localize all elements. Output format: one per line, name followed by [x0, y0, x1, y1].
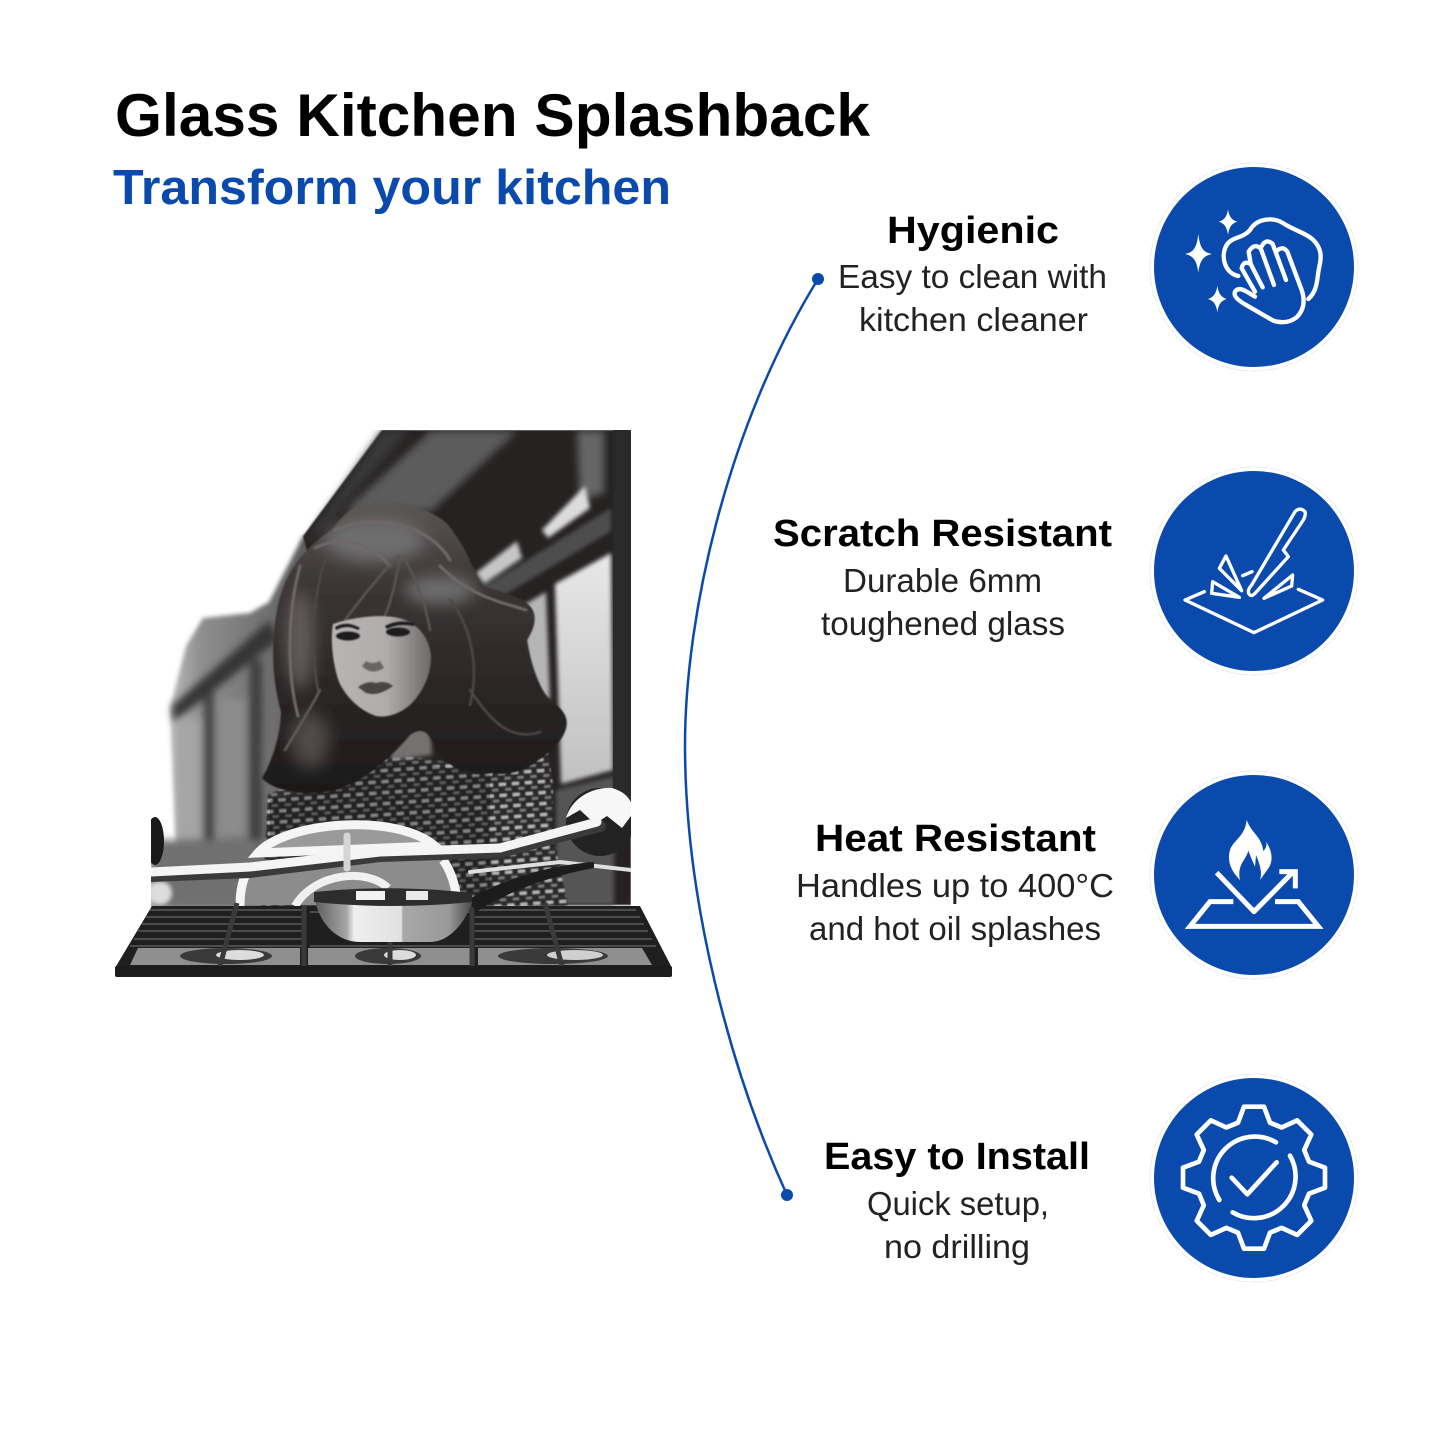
heading: Hygienic [887, 210, 1059, 252]
feature: Heat Resistant [796, 771, 1358, 979]
lower street haze [151, 840, 271, 910]
face [332, 616, 431, 717]
feature: Hygienic [838, 163, 1358, 371]
right mirror [566, 788, 634, 856]
heading: Easy to Install [824, 1136, 1090, 1178]
burners [180, 948, 608, 964]
icon: flame and heat arrow [1150, 771, 1358, 979]
frying pan [314, 862, 594, 942]
description: Quick setup, [867, 1185, 1049, 1222]
windows [476, 486, 614, 905]
icon: hand wiping with sparkles [1150, 163, 1358, 371]
pan handle [468, 862, 594, 912]
description: no drilling [884, 1228, 1030, 1265]
eave bands [303, 430, 604, 545]
description: Durable 6mm [843, 562, 1042, 599]
description [821, 562, 1065, 642]
hair soft tones [286, 518, 476, 768]
icon: knife scratching glass [1150, 467, 1358, 675]
neck [389, 730, 434, 762]
description: and hot oil splashes [809, 910, 1101, 947]
dark right edge [613, 430, 631, 830]
description: kitchen cleaner [859, 301, 1088, 338]
face shape [332, 616, 431, 717]
description [867, 1185, 1049, 1265]
left mirror [151, 817, 164, 865]
pan body [315, 893, 472, 942]
feature: Easy to Install [824, 1074, 1358, 1282]
top dot [812, 273, 824, 285]
bottom dot [781, 1189, 793, 1201]
description [796, 867, 1114, 947]
left building [151, 534, 316, 906]
hob front edge [115, 966, 672, 977]
grates [130, 910, 656, 946]
heading: Scratch Resistant [773, 513, 1112, 555]
pan supports [220, 903, 562, 966]
sweater [262, 752, 568, 906]
right building [303, 430, 631, 905]
heading: Heat Resistant [815, 818, 1096, 860]
description: Easy to clean with [838, 258, 1107, 295]
nose shadow [362, 661, 384, 672]
description: toughened glass [821, 605, 1065, 642]
hair [262, 502, 567, 793]
lips [358, 682, 393, 694]
description: Handles up to 400°C [796, 867, 1114, 904]
hair wisps [280, 790, 296, 795]
hair strands [285, 522, 540, 750]
scooter dome [240, 825, 457, 906]
title: Glass Kitchen Splashback [115, 82, 871, 149]
hair mass [262, 502, 567, 793]
hob top surface [115, 906, 672, 968]
handlebar [151, 822, 631, 876]
eyes and brows [335, 622, 415, 640]
pan rim [314, 888, 472, 906]
left building windows [172, 620, 278, 860]
subtitle: Transform your kitchen [113, 161, 671, 215]
burner panels [130, 948, 652, 965]
photo: woman on scooter printed on splashback [146, 430, 634, 910]
description [838, 258, 1107, 338]
product image: glass splashback above hob [115, 430, 672, 977]
curved connector line [685, 273, 824, 1201]
feature: Scratch Resistant [773, 467, 1358, 675]
icon: gear with check mark [1150, 1074, 1358, 1282]
hob [115, 903, 672, 977]
